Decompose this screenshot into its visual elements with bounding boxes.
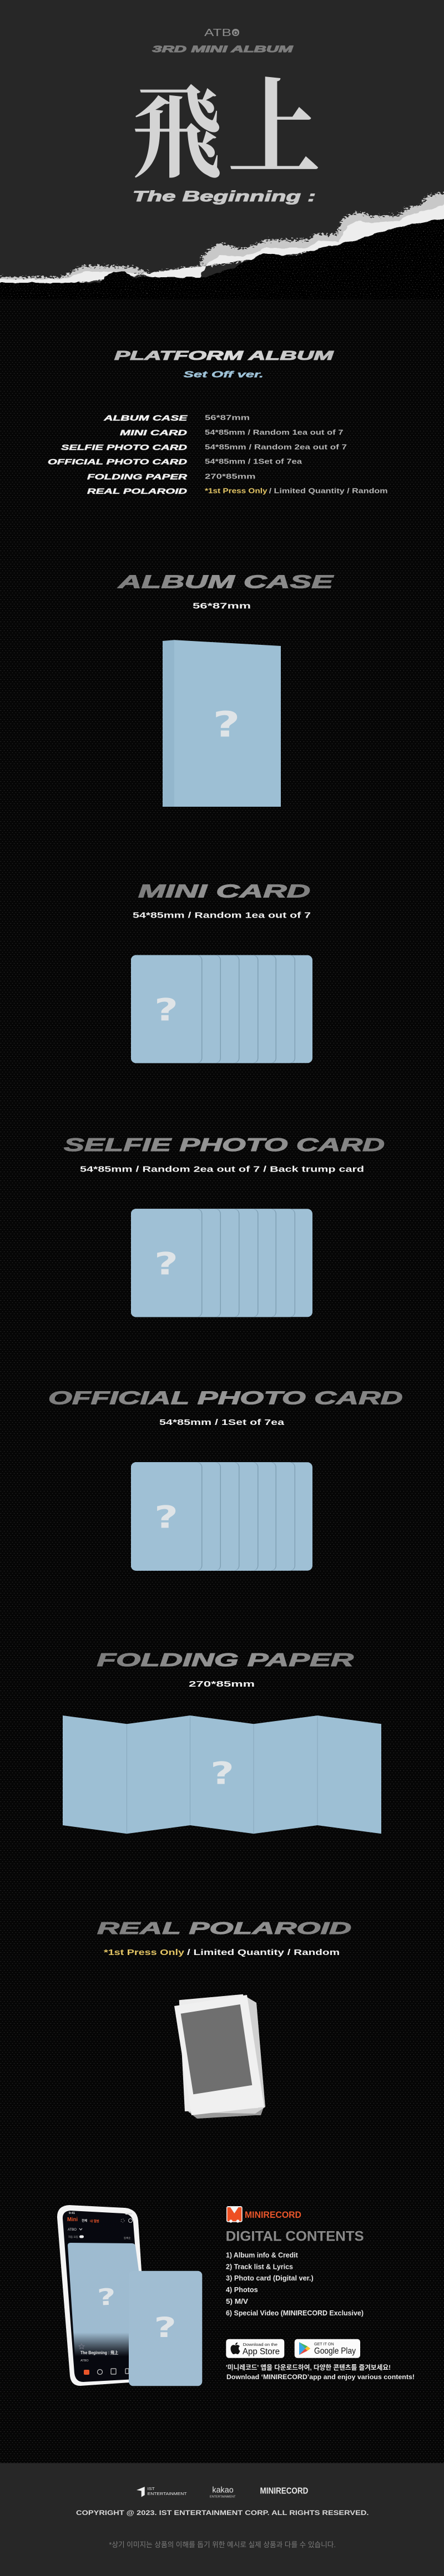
album title: hanja: 上 (228, 70, 321, 188)
torn paper edge (0, 192, 444, 299)
phone status and menu: Mini (67, 2217, 78, 2223)
phone status and menu: 자동 요입 (68, 2235, 78, 2239)
icon: question mark: ? (154, 992, 178, 1028)
spec values: 54*85mm / Random 2ea out of 7 (205, 442, 347, 451)
card stack (131, 1209, 312, 1317)
contents list: 2) Track list & Lyrics (226, 2263, 293, 2271)
app store button: Download on the (243, 2342, 278, 2347)
google play button: Google Play (314, 2346, 356, 2356)
size text: 54*85mm / Random 1ea out of 7 (133, 911, 311, 920)
contents list: 5) M/V (226, 2297, 248, 2305)
panel: real polaroid (97, 1918, 351, 2119)
logo: IST entertainment: ENTERTAINMENT (148, 2491, 187, 2496)
size text: 270*85mm (189, 1679, 255, 1689)
icon: apple (231, 2343, 240, 2354)
logo: ATBO (204, 27, 239, 38)
album title: hanja: 飛 (132, 77, 222, 191)
logo: kakao entertainment: ENTERTAINMENT (210, 2495, 236, 2498)
contents list: 6) Special Video (MINIRECORD Exclusive) (226, 2309, 364, 2317)
contents list: 4) Photos (226, 2285, 258, 2294)
subtitle: 3RD MINI ALBUM: 3RD MINI ALBUM (152, 44, 294, 54)
panel: mini card (131, 880, 312, 1063)
copyright: COPYRIGHT @ 2023. IST ENTERTAINMENT CORP. ALL RIGHTS RESERVED. (76, 2509, 369, 2517)
heading: platform album: PLATFORM ALBUM (114, 348, 334, 363)
heading: FOLDING PAPER (97, 1650, 354, 1670)
icon: question mark: ? (154, 2312, 176, 2344)
logo: ATBO: O (233, 30, 238, 37)
panel: platform album overview (48, 348, 388, 495)
spec values: 54*85mm / 1Set of 7ea (205, 457, 302, 466)
heading: REAL POLAROID (97, 1918, 351, 1938)
spec values: *1st Press Only (205, 487, 268, 495)
phone song info (79, 2344, 118, 2363)
spec values (205, 414, 388, 495)
download note (226, 2363, 415, 2381)
folded paper (63, 1715, 381, 1834)
spec labels: SELFIE PHOTO CARD (61, 444, 187, 452)
icon: question mark: ? (210, 1756, 234, 1791)
phone song info: ATBO (80, 2359, 89, 2363)
phone tab bar (84, 2369, 129, 2375)
heading: MINI CARD (138, 880, 310, 901)
google play button: GET IT ON (314, 2341, 334, 2346)
footer panel (0, 2463, 444, 2576)
album case box (163, 640, 281, 807)
header panel (0, 0, 444, 299)
description (104, 1948, 340, 1957)
app store button: App Store (243, 2347, 280, 2356)
panel: digital contents phone (57, 2205, 202, 2386)
icon: question mark: ? (154, 1246, 178, 1282)
card stack (131, 1462, 312, 1571)
panel: digital contents text (226, 2206, 415, 2381)
spec values: 56*87mm (205, 414, 250, 422)
spec labels: OFFICIAL PHOTO CARD (48, 458, 187, 466)
phone status and menu: 내 앨범 (90, 2219, 99, 2223)
panel: folding paper (63, 1650, 381, 1834)
phone artwork (68, 2243, 145, 2356)
panel: album case (117, 572, 334, 807)
spec labels: FOLDING PAPER (87, 472, 187, 481)
heading: ALBUM CASE (117, 572, 334, 592)
app store button (226, 2339, 284, 2358)
version label: Set Off ver. (184, 370, 264, 380)
description: *1st Press Only (104, 1948, 185, 1957)
polaroid stack (174, 1994, 265, 2119)
logo: kakao entertainment: kakao (212, 2486, 234, 2495)
phone song info: The Beginning : 飛上 (80, 2350, 118, 2355)
phone status and menu: ATBO (68, 2228, 77, 2232)
icon: question mark: ? (213, 704, 240, 745)
icon: play triangle (299, 2342, 310, 2355)
panel: selfie photo card (64, 1134, 385, 1317)
logo: IST entertainment: IST (148, 2486, 155, 2491)
download note: '미니레코드' 앱을 다운로드하여, 다양한 콘텐츠를 즐겨보세요! (226, 2363, 391, 2371)
spec labels: ALBUM CASE (103, 414, 188, 422)
brand name: MINIRECORD (245, 2210, 301, 2220)
phone status and menu: 등록순 (124, 2236, 130, 2240)
heading: digital contents: DIGITAL CONTENTS (226, 2229, 364, 2244)
phone status and menu: 9:41 (69, 2212, 75, 2215)
heading: OFFICIAL PHOTO CARD (48, 1388, 403, 1408)
logo: IST entertainment (137, 2486, 187, 2497)
spec labels: MINI CARD (120, 429, 187, 437)
size text: 54*85mm / Random 2ea out of 7 / Back trump card (80, 1164, 364, 1174)
contents list: 1) Album info & Credit (226, 2251, 298, 2259)
phone status and menu (67, 2212, 132, 2240)
description: / Limited Quantity / Random (187, 1948, 340, 1957)
logo: ATBO: ATB (204, 27, 231, 38)
disclaimer: *상기 이미지는 상품의 이해를 돕기 위한 예시로 실제 상품과 다를 수 있습니다. (109, 2541, 336, 2549)
spec labels: REAL POLAROID (87, 487, 187, 495)
contents list: 3) Photo card (Digital ver.) (226, 2274, 314, 2282)
logo: minirecord: MINIRECORD (260, 2486, 308, 2496)
album title: The Beginning: The Beginning : (133, 188, 316, 205)
size text: 54*85mm / 1Set of 7ea (159, 1418, 285, 1427)
contents list (226, 2251, 364, 2317)
spec values: 270*85mm (205, 472, 255, 480)
heading: SELFIE PHOTO CARD (64, 1134, 385, 1155)
front card (129, 2271, 202, 2386)
icon: question mark: ? (97, 2283, 117, 2311)
icon: minirecord logo (226, 2206, 243, 2223)
download note: Download ‘MINIRECORD’app and enjoy various contents! (226, 2373, 415, 2381)
size text: 56*87mm (193, 601, 251, 610)
google play button (295, 2339, 360, 2358)
album title: hanja (132, 70, 321, 191)
panel: official photo card (48, 1388, 403, 1571)
spec labels (48, 414, 188, 495)
icon: question mark: ? (154, 1500, 178, 1535)
phone status and menu: 전체 (82, 2218, 87, 2223)
logo: kakao entertainment (210, 2486, 236, 2498)
phone mockup (57, 2205, 149, 2386)
spec values: / Limited Quantity / Random (269, 487, 388, 495)
card stack (131, 955, 312, 1063)
spec values: 54*85mm / Random 1ea out of 7 (205, 428, 343, 436)
